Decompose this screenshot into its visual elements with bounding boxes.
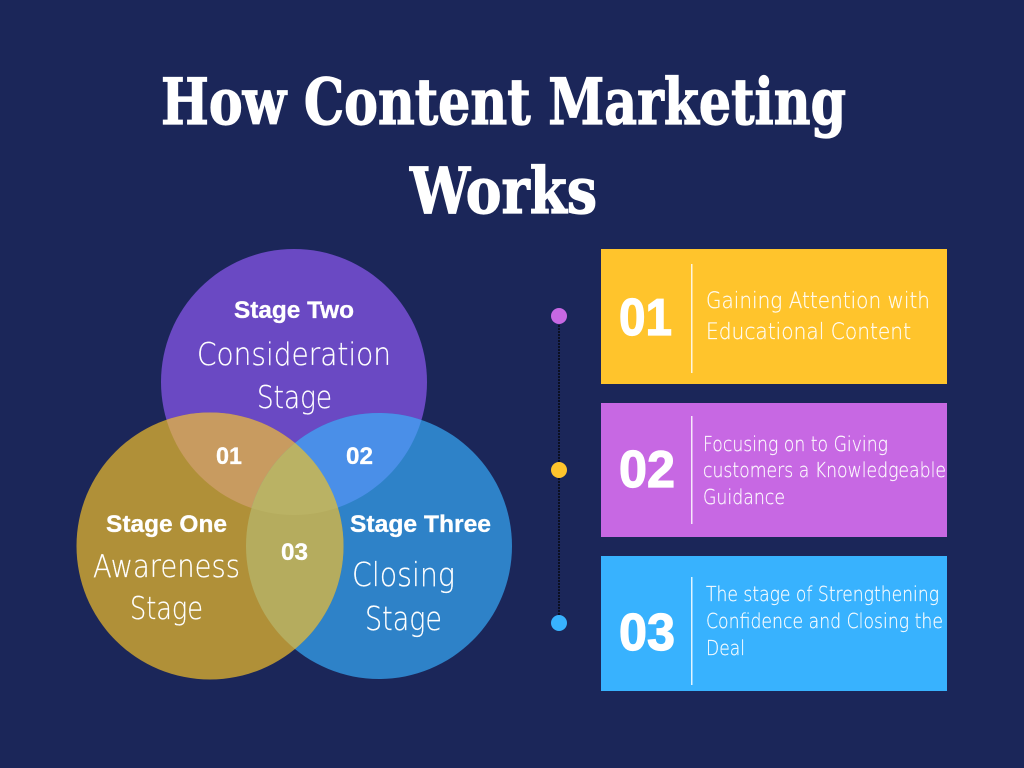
title: Works [409,154,597,229]
label: stage three: Closing [352,555,455,594]
card 01: 01 [619,289,672,347]
card 01 text: Educational Content [706,320,911,345]
card 03 text [706,582,943,660]
title: How Content Marketing [161,65,846,140]
label: stage one: Awareness [93,549,240,585]
timeline dot 3 [551,615,567,631]
venn diagram [76,249,512,680]
circle: stage two [161,249,427,515]
title [161,65,846,229]
card 02 text: customers a Knowledgeable [703,458,946,482]
label: stage one: Stage [130,591,203,627]
card 02 text [703,432,946,509]
label: stage three [350,511,491,638]
label: stage three: Stage Three [350,511,491,538]
card 02: 02 [619,441,675,499]
card 01 text [706,289,930,345]
label: stage one: Stage One [106,511,227,538]
label: stage one [93,511,240,627]
card 03 [601,556,947,691]
label: stage two: Stage Two [234,297,354,324]
overlap number 02: 02 [346,443,373,470]
overlap: stage two and three [252,413,422,508]
overlap number 01: 01 [216,443,242,470]
card 02 [601,403,947,537]
circle: stage one [76,412,344,680]
card 02 text: Focusing on to Giving [703,432,888,456]
card 01 [601,249,947,384]
card 03 text: Confidence and Closing the [706,609,943,633]
card 03: 03 [619,604,675,662]
overlap number 03: 03 [281,539,308,566]
card 02 text: Guidance [703,485,785,509]
label: stage two: Stage [257,380,332,416]
label: stage three: Stage [365,599,442,638]
card 01 text: Gaining Attention with [706,289,930,314]
card 03 text: The stage of Strengthening [706,582,939,606]
overlap: stage one and three [246,443,344,649]
timeline dot 1 [551,308,567,324]
label: stage two [197,297,391,416]
card 03 text: Deal [706,636,745,660]
circle: stage three [246,413,512,679]
label: stage two: Consideration [197,337,391,373]
overlap: all three stages [252,443,338,508]
timeline dot 2 [551,462,567,478]
overlap: stage one and two [166,412,295,508]
timeline [551,308,567,631]
